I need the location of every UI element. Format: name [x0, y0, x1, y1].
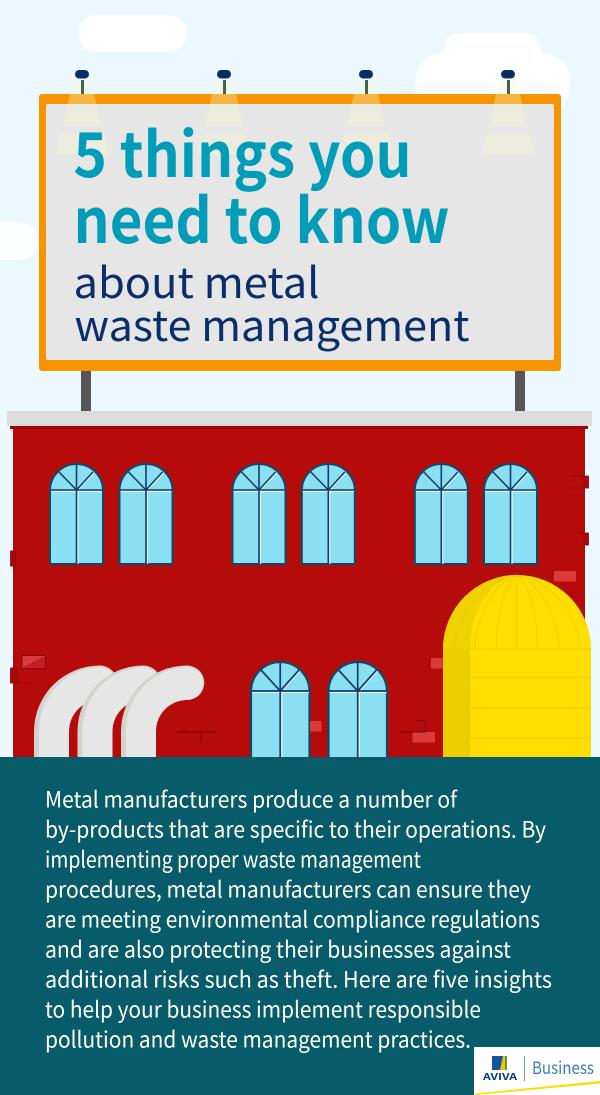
- intro text: procedures, metal manufacturers can ensure they: [45, 872, 531, 904]
- pipe 1: [34, 665, 117, 759]
- roof shadow: [10, 426, 588, 429]
- billboard: [39, 70, 561, 371]
- yellow swoosh: [475, 1081, 600, 1095]
- billboard frame: [39, 94, 561, 371]
- lamps: [55, 70, 535, 155]
- lamp 4: [481, 70, 535, 155]
- light bricks: [22, 571, 576, 742]
- window row 1, window 5: [415, 464, 468, 564]
- intro text: additional risks such as theft. Here are five insights: [45, 962, 552, 994]
- lower window 1: [251, 662, 310, 759]
- title line 1: 5 things you: [74, 105, 412, 195]
- intro panel: [0, 757, 600, 1095]
- subtitle line 2: waste management: [74, 293, 470, 354]
- billboard face: [46, 104, 554, 360]
- Aviva wordmark: AVIVA: [482, 1069, 518, 1083]
- billboard posts: [81, 368, 525, 412]
- intro text: [45, 782, 552, 1054]
- pipe 3: [121, 665, 204, 759]
- cloud: left edge: [0, 222, 39, 260]
- brick wall: [13, 429, 585, 759]
- lower window 2: [328, 662, 387, 759]
- yellow silo: [443, 575, 591, 759]
- lamp 1: [55, 70, 109, 155]
- cloud: top right: [415, 33, 570, 110]
- intro text: pollution and waste management practices.: [45, 1022, 471, 1054]
- roof: [7, 411, 592, 426]
- lamp 2: [197, 70, 251, 155]
- title line 2: need to know: [74, 171, 450, 261]
- cloud: top left: [78, 15, 187, 52]
- window row 1, window 2: [120, 464, 172, 564]
- lamp 3: [339, 70, 393, 155]
- Business label: Business: [532, 1054, 594, 1079]
- window row 1, window 4: [302, 464, 355, 564]
- building: [7, 411, 592, 759]
- window row 1, window 1: [50, 464, 103, 564]
- window row 1, window 6: [484, 464, 537, 564]
- title: [74, 105, 470, 354]
- intro text: and are also protecting their businesses against: [45, 932, 511, 964]
- intro text: Metal manufacturers produce a number of: [45, 782, 458, 814]
- brick mortar lines: [176, 720, 426, 742]
- logo divider: [524, 1056, 525, 1081]
- pipe 2: [78, 665, 161, 759]
- intro text: to help your business implement responsible: [45, 992, 481, 1024]
- subtitle line 1: about metal: [74, 250, 320, 311]
- intro text: are meeting environmental compliance regulations: [45, 902, 540, 934]
- intro text: implementing proper waste management: [45, 842, 421, 874]
- intro text: by-products that are specific to their operations. By: [45, 812, 546, 844]
- logo block: [474, 1047, 600, 1095]
- window row 1, window 3: [232, 464, 286, 564]
- wall edge bricks: [10, 476, 588, 683]
- Aviva mark: [492, 1056, 507, 1070]
